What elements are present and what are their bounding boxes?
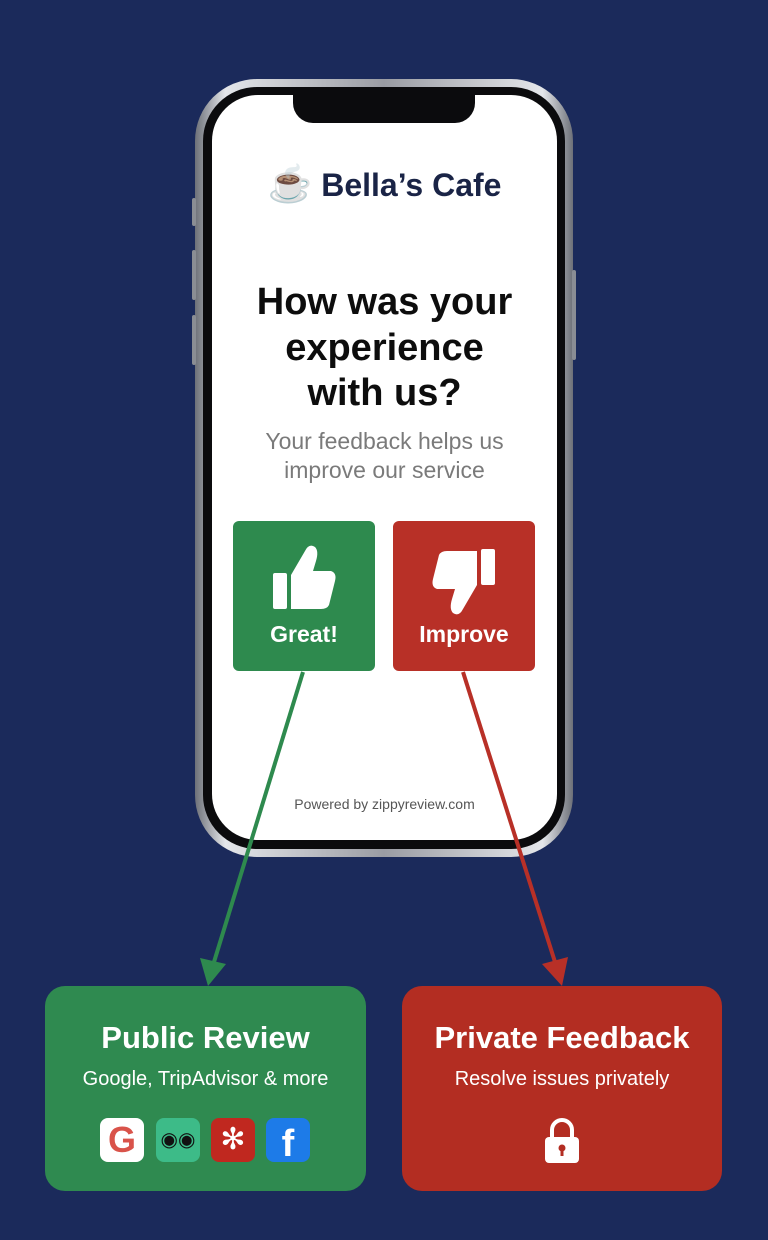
icon: thumbs down [432,549,495,614]
icon: thumbs up [273,546,336,609]
button: improve [393,521,535,671]
icons: review sites: ✻ [220,1123,246,1156]
question heading: with us? [307,372,462,414]
phone [195,79,573,857]
side buttons [192,198,196,226]
brand header: ☕ Bella’s Cafe [268,163,501,204]
subtitle [265,428,504,483]
phone bezel [203,87,565,849]
panel: private feedback: Private Feedback [434,1020,690,1055]
panel: public review [45,986,366,1191]
arrow: red [463,672,568,986]
icons: review sites: f [282,1123,294,1165]
panel: private feedback: Resolve issues privately [455,1068,669,1090]
subtitle: Your feedback helps us [265,428,504,454]
question heading [257,281,512,414]
question heading: How was your [257,281,512,323]
arrow: green [200,672,303,986]
panel: public review: Google, TripAdvisor & more [83,1068,328,1090]
footer text: Powered by zippyreview.com [294,796,475,812]
icons: review sites [100,1118,310,1165]
screen [212,95,557,840]
button: great [233,521,375,671]
icons: review sites: G [108,1119,136,1160]
panel: public review: Public Review [101,1020,310,1055]
button: great: Great! [270,621,338,647]
icon: lock [545,1118,579,1163]
subtitle: improve our service [284,457,485,483]
panel: private feedback [402,986,722,1191]
notch [293,93,475,123]
question heading: experience [285,326,484,368]
button: improve: Improve [419,621,509,647]
icons: review sites: ◉◉ [161,1129,195,1151]
